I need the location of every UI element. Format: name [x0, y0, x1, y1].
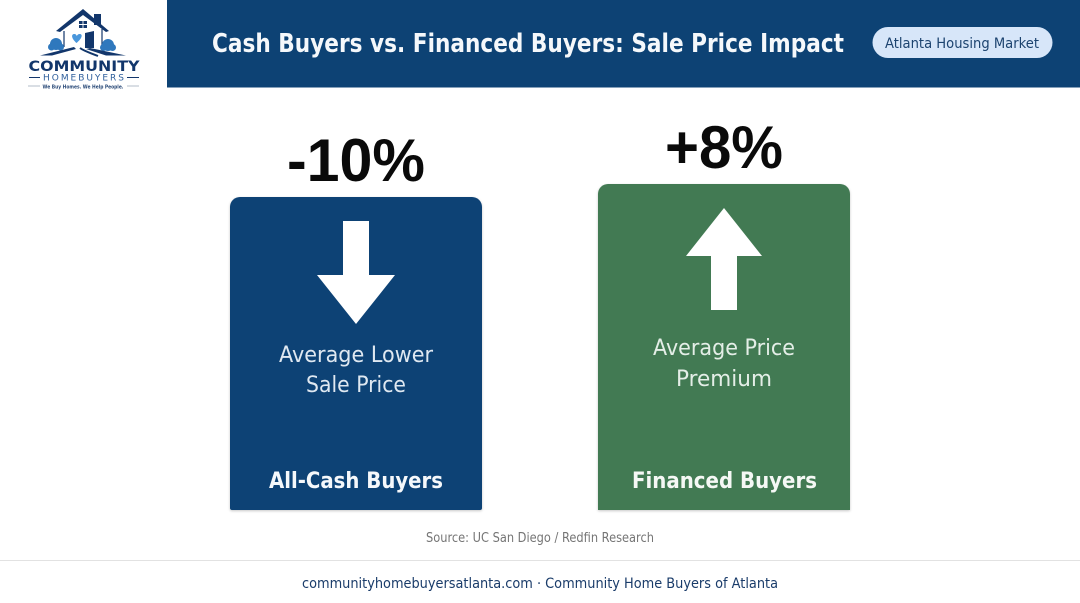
panel: financed buyers — [598, 184, 850, 510]
panel label: Financed Buyers: Financed Buyers — [632, 469, 817, 494]
logo wordmark: COMMUNITY — [28, 59, 140, 75]
badge: Atlanta Housing Market — [872, 27, 1052, 58]
panel text: average price premium — [653, 336, 795, 392]
logo subtitle: HOMEBUYERS — [43, 74, 125, 84]
footer: communityhomebuyersatlanta.com · Community Home Buyers of Atlanta — [302, 576, 778, 592]
title: Cash Buyers vs. Financed Buyers: Sale Price Impact — [212, 29, 844, 59]
panel text: average lower sale price: Sale Price — [306, 373, 406, 398]
panel text: average lower sale price: Average Lower — [279, 343, 434, 368]
logo tagline: We Buy Homes. We Help People. — [42, 84, 124, 90]
header banner — [167, 0, 1080, 88]
icon: house — [40, 9, 126, 56]
panel label: All-Cash Buyers: All-Cash Buyers — [269, 469, 443, 494]
badge: Atlanta Housing Market: Atlanta Housing Market — [885, 36, 1039, 52]
panel text: average price premium: Premium — [676, 367, 772, 392]
stat: +8%: +8% — [665, 114, 783, 181]
logo: Community Homebuyers — [28, 9, 140, 90]
panel: all-cash buyers — [230, 197, 482, 510]
icon: down arrow — [317, 221, 395, 324]
panel text: average price premium: Average Price — [653, 336, 795, 361]
panel text: average lower sale price — [279, 343, 434, 398]
stat: -10%: -10% — [287, 127, 425, 194]
source note: Source: UC San Diego / Redfin Research — [426, 531, 654, 546]
icon: up arrow — [686, 208, 762, 310]
